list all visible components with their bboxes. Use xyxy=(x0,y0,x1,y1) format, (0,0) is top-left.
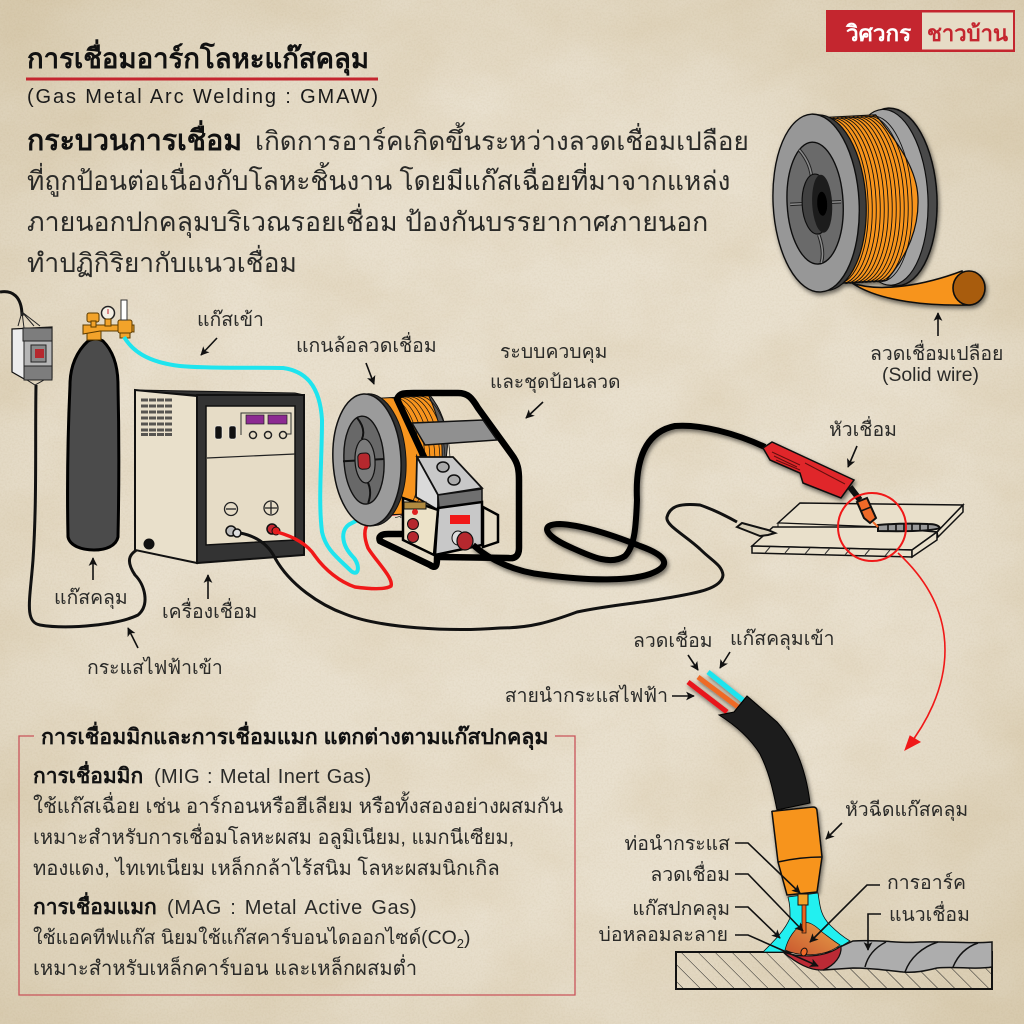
MAG text: 2 xyxy=(457,936,464,951)
icon: large wire spool xyxy=(768,106,985,305)
magnifier circle and red arrow xyxy=(838,493,945,750)
MIG text: การเชื่อมมิก xyxy=(33,760,143,788)
rear box xyxy=(483,507,498,547)
title xyxy=(26,39,378,108)
icon: plates with weld bead xyxy=(737,503,963,557)
labels: cross-section: แก๊สปกคลุม xyxy=(632,898,730,921)
label: solid wire: ลวดเชื่อมเปลือย xyxy=(870,340,1003,365)
intro text block xyxy=(27,120,749,278)
labels: cross-section: บ่อหลอมละลาย xyxy=(599,924,728,946)
labels: equipment: แก๊สคลุม xyxy=(54,587,128,610)
MAG text: การเชื่อมแมก xyxy=(33,891,157,919)
labels: cross-section: แก๊สคลุมเข้า xyxy=(730,628,834,651)
MIG text: (MIG : Metal Inert Gas) xyxy=(154,766,372,788)
MIG text: ทองแดง, ไทเทเนียม เหล็กกล้าไร้สนิม โลหะผสมนิกเกิล xyxy=(33,855,500,880)
polarity symbols xyxy=(224,501,278,516)
upper housing xyxy=(417,457,482,495)
hose section xyxy=(688,672,822,895)
panel: MIG vs MAG: การเชื่อมมิกและการเชื่อมแมก แตกต่างตามแก๊สปกคลุม xyxy=(41,721,548,751)
icon: gas cylinder xyxy=(68,339,119,550)
labels: equipment: กระแสไฟฟ้าเข้า xyxy=(87,656,223,679)
MIG text: เหมาะสำหรับการเชื่อมโลหะผสม อลูมิเนียม, แมกนีเซียม, xyxy=(33,823,514,850)
intro text block: ที่ถูกป้อนต่อเนื่องกับโลหะชิ้นงาน โดยมีแก๊สเฉื่อยที่มาจากแหล่ง xyxy=(27,162,730,197)
arc xyxy=(785,922,840,955)
brand badge: ชาวบ้าน xyxy=(927,21,1008,46)
labels: cross-section: แนวเชื่อม xyxy=(889,901,970,926)
labels: equipment: แก๊สเข้า xyxy=(197,309,264,331)
cyan gas hose xyxy=(124,337,407,573)
weld plate xyxy=(676,952,992,989)
icon: circuit breaker xyxy=(12,312,52,385)
molten pool xyxy=(783,946,841,970)
intro text block: กระบวนการเชื่อม xyxy=(27,120,242,157)
icon: wire feeder with spool xyxy=(330,390,519,567)
lower housing xyxy=(435,502,482,555)
work cable xyxy=(240,504,737,629)
icon: welding machine xyxy=(135,390,304,563)
labels: cross-section: ท่อนำกระแส xyxy=(625,833,730,855)
feeder frame xyxy=(397,393,519,558)
MAG text: (MAG : Metal Active Gas) xyxy=(167,897,417,919)
weld bead xyxy=(823,941,992,972)
label: solid wire: (Solid wire) xyxy=(882,364,979,386)
feeder spool xyxy=(330,390,453,528)
MAG text: เหมาะสำหรับเหล็กคาร์บอน และเหล็กผสมต่ำ xyxy=(33,954,417,980)
power input cable xyxy=(0,292,147,627)
hose connector xyxy=(452,531,464,545)
strap xyxy=(412,420,497,445)
vents xyxy=(141,400,172,434)
shielding gas xyxy=(763,893,850,952)
welding torch hose xyxy=(473,426,765,579)
labels: equipment xyxy=(54,309,897,679)
labels: cross-section: หัวฉีดแก๊สคลุม xyxy=(845,799,968,822)
red power cable xyxy=(277,512,415,589)
intro text block: เกิดการอาร์คเกิดขึ้นระหว่างลวดเชื่อมเปลือย xyxy=(255,122,749,156)
brand badge: วิศวกร xyxy=(845,21,911,46)
panel: MIG vs MAG xyxy=(19,721,575,995)
intro text block: ภายนอกปกคลุมบริเวณรอยเชื่อม ป้องกันบรรยากาศภายนอก xyxy=(27,203,708,238)
title: การเชื่อมอาร์กโลหะแก๊สคลุม xyxy=(27,39,369,76)
labels: cross-section: ลวดเชื่อม xyxy=(633,627,713,652)
labels: cross-section: ลวดเชื่อม xyxy=(650,861,730,886)
icon: gas regulator xyxy=(83,300,134,340)
labels: equipment: หัวเชื่อม xyxy=(829,416,897,441)
labels: equipment: ระบบควบคุม xyxy=(500,341,607,364)
icon: torch nozzle xyxy=(850,487,878,527)
labels: equipment: แกนล้อลวดเชื่อม xyxy=(296,332,437,357)
labels: equipment: เครื่องเชื่อม xyxy=(162,598,257,623)
contact tip and wire xyxy=(798,894,808,905)
labels: cross-section xyxy=(505,627,970,966)
MAG text: ใช้แอคทีฟแก๊ส นิยมใช้แก๊สคาร์บอนไดออกไซด์(CO xyxy=(33,927,457,949)
MIG text xyxy=(33,760,563,880)
title: (Gas Metal Arc Welding : GMAW) xyxy=(27,86,378,108)
labels: equipment: และชุดป้อนลวด xyxy=(490,372,620,394)
labels: cross-section: การอาร์ค xyxy=(887,871,966,894)
control display xyxy=(215,413,291,439)
labels: cross-section: สายนำกระแสไฟฟ้า xyxy=(505,684,668,707)
icon: MIG torch handle xyxy=(763,442,854,498)
MIG text: ใช้แก๊สเฉื่อย เช่น อาร์กอนหรือฮีเลียม หรือทั้งสองอย่างผสมกัน xyxy=(33,791,563,818)
left plate xyxy=(403,498,438,555)
MAG text: ) xyxy=(464,927,470,949)
MAG text xyxy=(33,891,470,980)
label: solid wire xyxy=(870,313,1003,386)
diagram: torch cross-section xyxy=(676,672,992,989)
intro text block: ทำปฏิกิริยากับแนวเชื่อม xyxy=(27,245,297,278)
brand badge xyxy=(826,10,1015,52)
